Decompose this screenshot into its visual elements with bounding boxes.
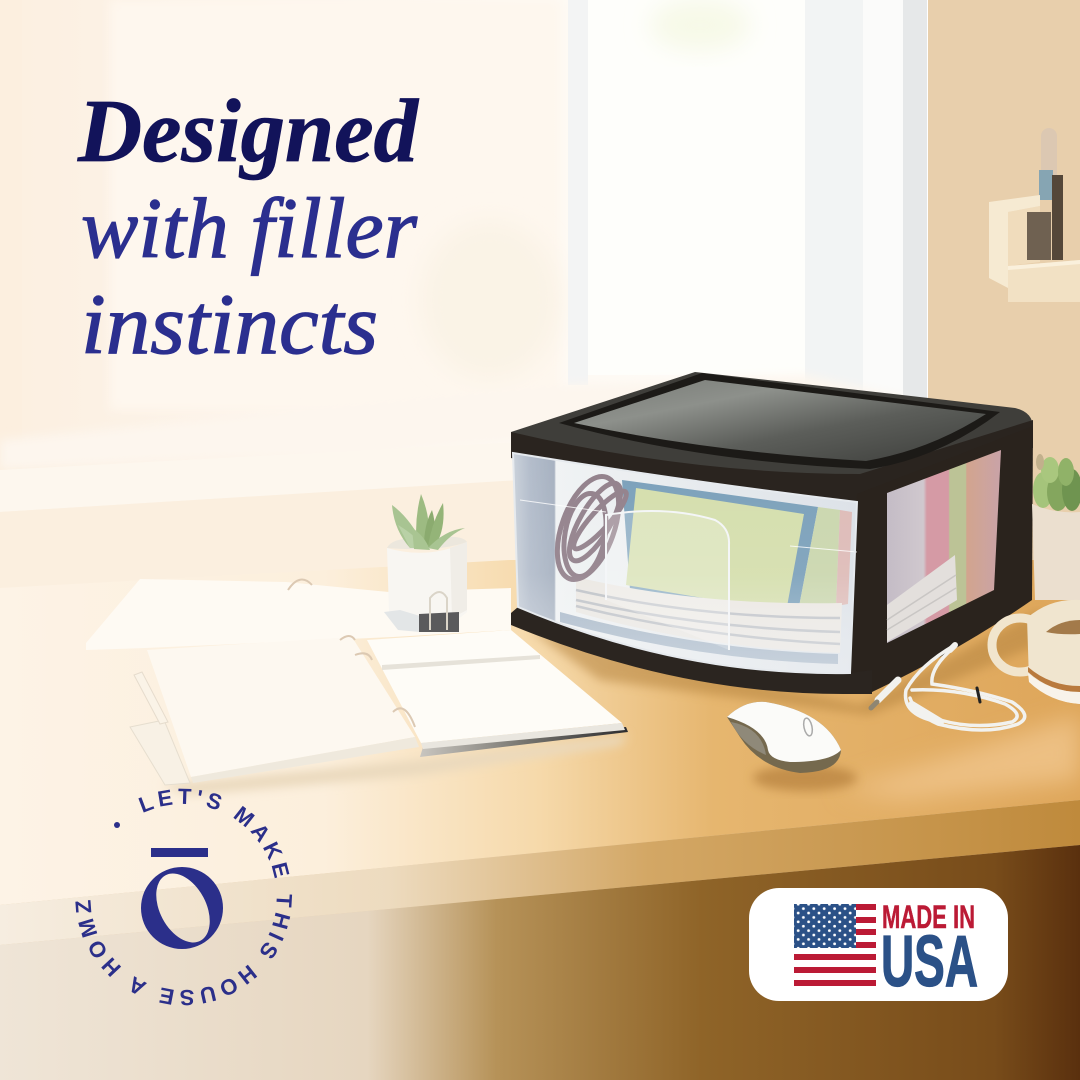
usa label: USA (881, 922, 978, 1002)
drawer base (511, 607, 872, 694)
lid (559, 373, 1000, 469)
front clear panel (513, 453, 857, 673)
heading (77, 82, 420, 372)
dot separator (114, 822, 120, 828)
binder rings (288, 580, 415, 727)
pot (387, 542, 467, 630)
drawer top (511, 372, 1033, 498)
drawer contents (520, 468, 857, 664)
open ring binder notebook (86, 579, 628, 795)
cable coil (545, 468, 632, 588)
heading line 3: instincts (81, 276, 378, 372)
circular text: LET'S MAKE THIS HOUSE A HOMZ (75, 788, 292, 1006)
wall shelf with items (989, 128, 1080, 302)
side window (887, 450, 1001, 643)
made in label: MADE IN (882, 899, 975, 935)
heading line 2: with filler (81, 180, 418, 276)
black clear plastic storage drawer (511, 372, 1033, 694)
handle (606, 511, 729, 650)
sunlight patch on desk (840, 715, 1080, 800)
small potted succulent with binder clip (384, 494, 467, 632)
computer mouse (727, 702, 857, 791)
circular brand badge (75, 788, 292, 1006)
succulent leaves (392, 494, 465, 550)
desk (0, 560, 1080, 1080)
drawer side frame (850, 426, 1033, 692)
succulent in beige pot (1032, 454, 1080, 600)
drawer shadow on desk (530, 610, 1050, 715)
heading line 1: Designed (77, 82, 420, 181)
coffee cup (992, 600, 1080, 704)
american flag (794, 904, 876, 986)
frosted panel overlay (513, 453, 857, 673)
usb cable (871, 645, 1025, 730)
made in usa badge (749, 888, 1008, 1002)
logo bar (151, 848, 208, 857)
logo o (141, 867, 223, 949)
binder clip (384, 592, 459, 632)
